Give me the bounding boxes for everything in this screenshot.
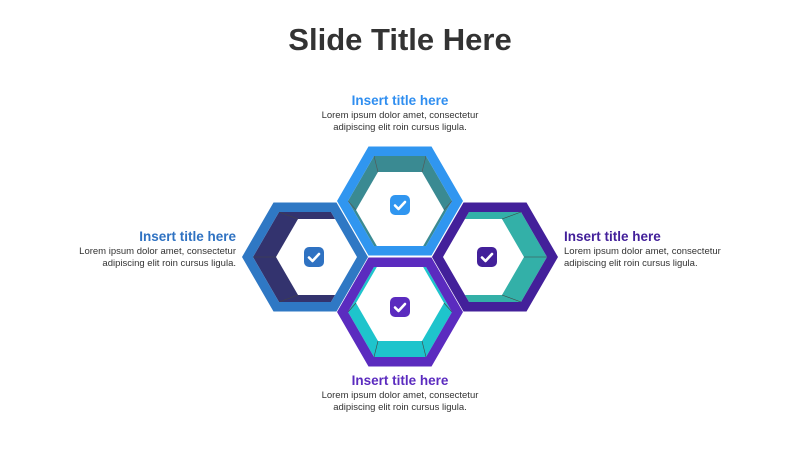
text: left: Insert title here — [139, 229, 236, 244]
text: bottom: Lorem ipsum dolor amet, consectetur — [322, 390, 478, 401]
text: bottom: adipiscing elit roin cursus ligula. — [333, 402, 467, 413]
text: top: Lorem ipsum dolor amet, consectetur — [322, 110, 478, 121]
text: bottom: Insert title here — [352, 373, 448, 388]
text: top: Insert title here — [352, 93, 448, 108]
text: left: Lorem ipsum dolor amet, consectetur — [79, 246, 236, 257]
hexagon: right — [432, 202, 558, 312]
text: right: Lorem ipsum dolor amet, consectetur — [564, 246, 721, 257]
text: bottom — [322, 373, 478, 413]
hexagon: bottom — [337, 258, 463, 366]
hexagon: left — [242, 202, 368, 312]
hexagon: top — [337, 146, 463, 256]
text: top — [322, 93, 478, 133]
text: left: adipiscing elit roin cursus ligula. — [102, 258, 236, 269]
text: left — [79, 229, 236, 269]
text: right: Insert title here — [564, 229, 661, 244]
title: Slide Title Here — [288, 22, 512, 57]
text: right: adipiscing elit roin cursus ligula. — [564, 258, 698, 269]
text: top: adipiscing elit roin cursus ligula. — [333, 122, 467, 133]
text: right — [564, 229, 721, 269]
